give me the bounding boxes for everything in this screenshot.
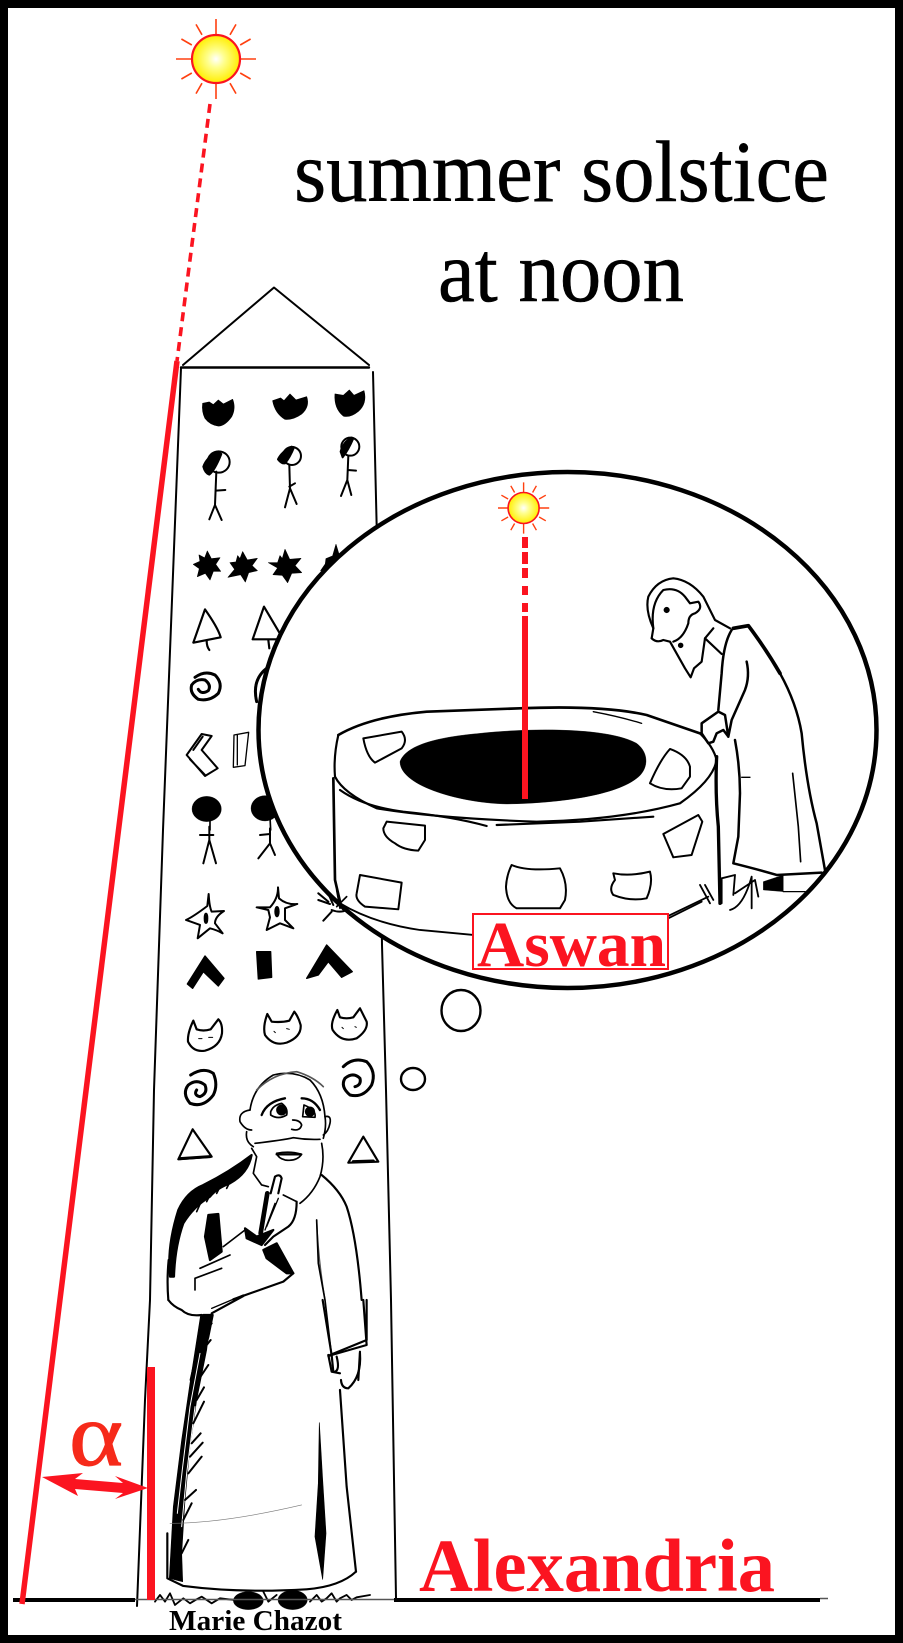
obelisk hieroglyphs and head of Eratosthenes xyxy=(168,1060,378,1300)
double arrow for angle xyxy=(42,1473,148,1499)
icon: spirals xyxy=(191,668,267,702)
small sun over well xyxy=(498,482,549,534)
icon: cat faces xyxy=(188,1008,367,1051)
obelisk hieroglyphs, upper rows xyxy=(193,390,365,583)
icon: triangles xyxy=(193,607,283,650)
panel: thought circle with well at Aswan xyxy=(258,472,876,988)
title: summer solstice at noon xyxy=(294,123,829,320)
circle outline xyxy=(258,472,876,988)
grass left of well xyxy=(330,890,347,910)
sun ray at Aswan: dashed then solid xyxy=(522,537,528,799)
angle alpha label: α xyxy=(69,1386,123,1485)
shoulder and arm xyxy=(168,1155,362,1300)
icon: open stars xyxy=(186,887,347,938)
icon: dark headed figures xyxy=(192,796,279,830)
robe right side and hem xyxy=(167,1300,367,1591)
robe xyxy=(702,626,825,903)
obelisk hieroglyphs, middle rows xyxy=(187,607,283,830)
icon: lotus row xyxy=(202,390,365,426)
robe, mid section xyxy=(168,1220,367,1380)
man looking into well xyxy=(647,578,825,918)
dark well opening xyxy=(400,730,646,804)
sun ray at Alexandria: dashed then solid xyxy=(22,104,210,1604)
icon: spiky stars row xyxy=(193,544,351,583)
feet xyxy=(233,1590,307,1610)
well xyxy=(330,707,717,935)
pointing hand xyxy=(261,1175,297,1245)
vertical gnomon line xyxy=(147,1367,155,1600)
head and beard xyxy=(240,1072,330,1203)
title: summer solstice at noon: summer solstice xyxy=(294,123,829,220)
icon: chevron and bar xyxy=(187,732,249,776)
well stones xyxy=(356,732,702,909)
label: Alexandria: Alexandria xyxy=(419,1525,775,1608)
icon: figure legs xyxy=(200,827,275,863)
icon: solid chevrons xyxy=(187,945,352,988)
obelisk hieroglyphs, lower rows xyxy=(186,827,367,1051)
foot xyxy=(763,875,783,892)
well rim and wall xyxy=(333,707,717,935)
obelisk outline xyxy=(137,288,396,1606)
title: summer solstice at noon: at noon xyxy=(438,223,684,320)
icon: triangles near head xyxy=(178,1129,378,1163)
robe left shaded edge xyxy=(169,1315,212,1582)
robe, lower section with feet and grass xyxy=(155,1300,370,1610)
thought bubbles xyxy=(401,990,480,1090)
icon: spirals near head xyxy=(185,1060,373,1105)
label: Aswan: Aswan xyxy=(477,909,666,981)
grass xyxy=(155,1592,370,1605)
ground line, left and right xyxy=(13,1598,828,1602)
head xyxy=(647,578,730,677)
grass by the man xyxy=(668,875,758,918)
credit: Marie Chazot: Marie Chazot xyxy=(169,1606,343,1637)
icon: stick figures row xyxy=(203,438,359,520)
large sun xyxy=(176,19,256,99)
